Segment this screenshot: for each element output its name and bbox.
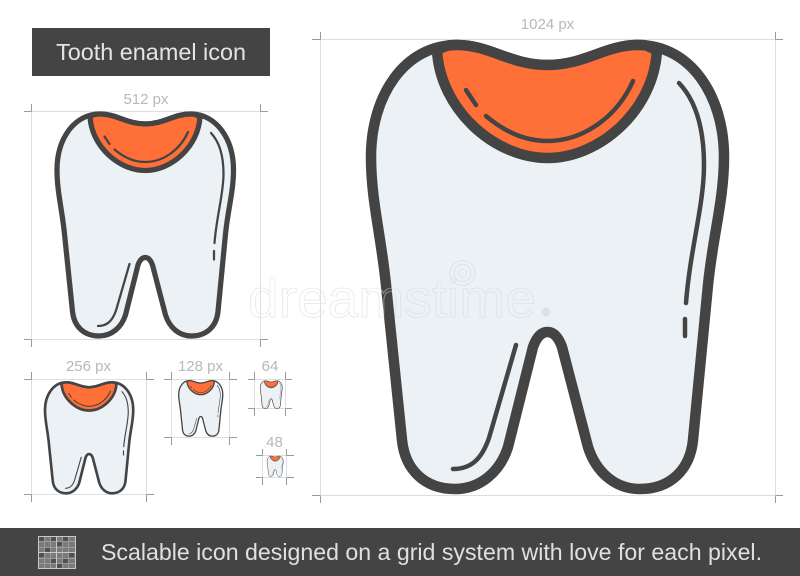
grid guides: 256 px — [24, 372, 154, 502]
grid guides: 128 px — [164, 372, 237, 445]
size label: 128 px: 128 px — [178, 358, 224, 375]
icon: tooth 64 px — [260, 381, 282, 409]
grid guides: 1024 px — [312, 32, 783, 503]
size label: 48: 48 — [266, 434, 283, 451]
grid guides: 64 px — [248, 372, 292, 416]
watermark: dreamstime — [248, 269, 536, 329]
icon: pixel grid — [38, 536, 76, 569]
icon: tooth 48 px — [267, 456, 283, 476]
footer bar — [0, 528, 800, 576]
icon: tooth 128 px — [179, 381, 223, 436]
icon: tooth 1024 px — [371, 45, 724, 489]
icon: tooth 512 px — [57, 114, 234, 336]
size label: 1024 px: 1024 px — [521, 16, 575, 33]
grid guides: 48 px — [256, 449, 294, 485]
icon: tooth 256 px — [45, 382, 133, 493]
size label: 512 px: 512 px — [123, 91, 169, 108]
grid guides: 512 px — [24, 104, 268, 347]
size label: 256 px: 256 px — [66, 358, 112, 375]
title banner — [32, 28, 270, 76]
size label: 64: 64 — [262, 358, 278, 375]
title banner: Tooth enamel icon — [56, 39, 246, 65]
footer caption: Scalable icon designed on a grid system with love for each pixel. — [101, 539, 762, 565]
